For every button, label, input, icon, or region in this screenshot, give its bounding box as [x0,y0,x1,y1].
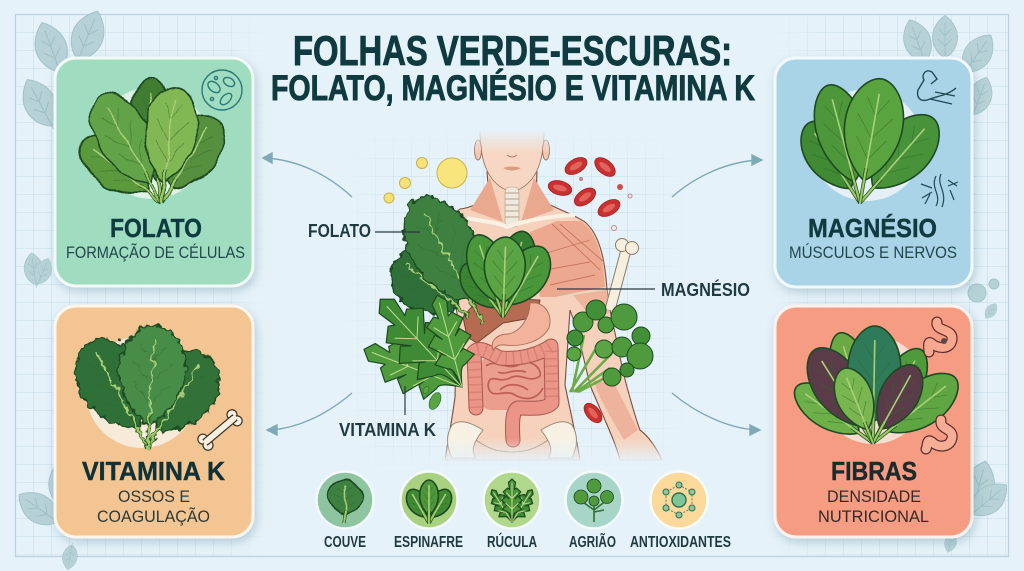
neck muscles [470,178,554,222]
skin [440,172,662,460]
legend: antioxidantes [630,472,731,551]
decorative background leaves, left [11,6,112,571]
arrow: to vitamina k [267,393,352,435]
face [474,132,550,190]
legend: couve: COUVE [324,534,366,551]
icon: cells [202,70,242,110]
pelvis bones [448,422,576,458]
panel: fibras [775,306,972,537]
callout: magnésio: MAGNÉSIO [661,279,750,300]
legend: agrião [566,472,622,551]
icon: yellow spheres [384,158,467,203]
callout: folato [308,221,420,241]
legend: espinafre: ESPINAFRE [394,534,463,551]
legend: rúcula: RÚCULA [487,533,537,551]
spinach on body [452,227,560,327]
text: fibras description [818,487,929,526]
legend: agrião: AGRIÃO [569,533,616,551]
watercress on body [567,300,653,392]
callout: vitamina k [339,386,436,440]
bone behind arm [610,238,638,310]
arrow: to folato [263,153,352,197]
text: fibras description: NUTRICIONAL [818,507,929,526]
panel: vitamina k [55,306,253,537]
arrow: to magnésio [672,155,762,197]
text: vitamina k description [97,487,210,526]
icon: arugula-like leaves [70,75,236,220]
arugula on body [354,279,484,412]
legend: rúcula [484,472,540,551]
kale on body [378,184,512,341]
icon: red blood cells [547,154,632,426]
stomach [492,303,550,350]
title: FOLATO, MAGNÉSIO E VITAMINA K [271,68,755,108]
text: vitamina k description: COAGULAÇÃO [97,507,210,526]
chest and shoulder muscle [530,221,610,318]
arrow: to fibras [672,393,760,435]
icon: mixed leaves [786,326,969,460]
icon: nerves [921,174,958,207]
large intestine [474,346,552,440]
small intestine [481,356,547,410]
title: FOLHAS VERDE-ESCURAS: [293,27,732,74]
panel: folato [55,58,253,286]
forearm muscle [593,380,638,440]
heading: folato: FOLATO [110,213,202,243]
legend: couve [316,472,374,551]
heading: fibras: FIBRAS [831,456,917,486]
title [271,27,755,108]
small falling leaves [422,385,443,411]
legend: espinafre [394,472,463,551]
trachea [505,187,519,227]
decorative background leaves, right [897,15,1015,555]
text: magnésio description: MÚSCULOS E NERVOS [789,243,957,262]
icon: bone [196,408,244,452]
icon: flexed arm [918,71,956,104]
heading: vitamina k: VITAMINA K [82,456,225,486]
text: vitamina k description: OSSOS E [118,487,190,506]
text: fibras description: DENSIDADE [827,487,921,506]
collarbone [467,215,575,227]
panel: magnésio [775,58,972,287]
text: folato description: FORMAÇÃO DE CÉLULAS [66,243,245,262]
human body [440,125,662,460]
liver [463,297,540,343]
heading: magnésio: MAGNÉSIO [808,213,937,243]
icon: stomach with food [928,322,952,352]
callout: vitamina k: VITAMINA K [339,420,436,440]
icon: spinach leaves [790,74,953,220]
icon: kale leaves [61,323,234,464]
legend: antioxidantes: ANTIOXIDANTES [630,534,731,551]
icon: stomach [926,420,952,449]
callout: folato: FOLATO [308,221,371,241]
